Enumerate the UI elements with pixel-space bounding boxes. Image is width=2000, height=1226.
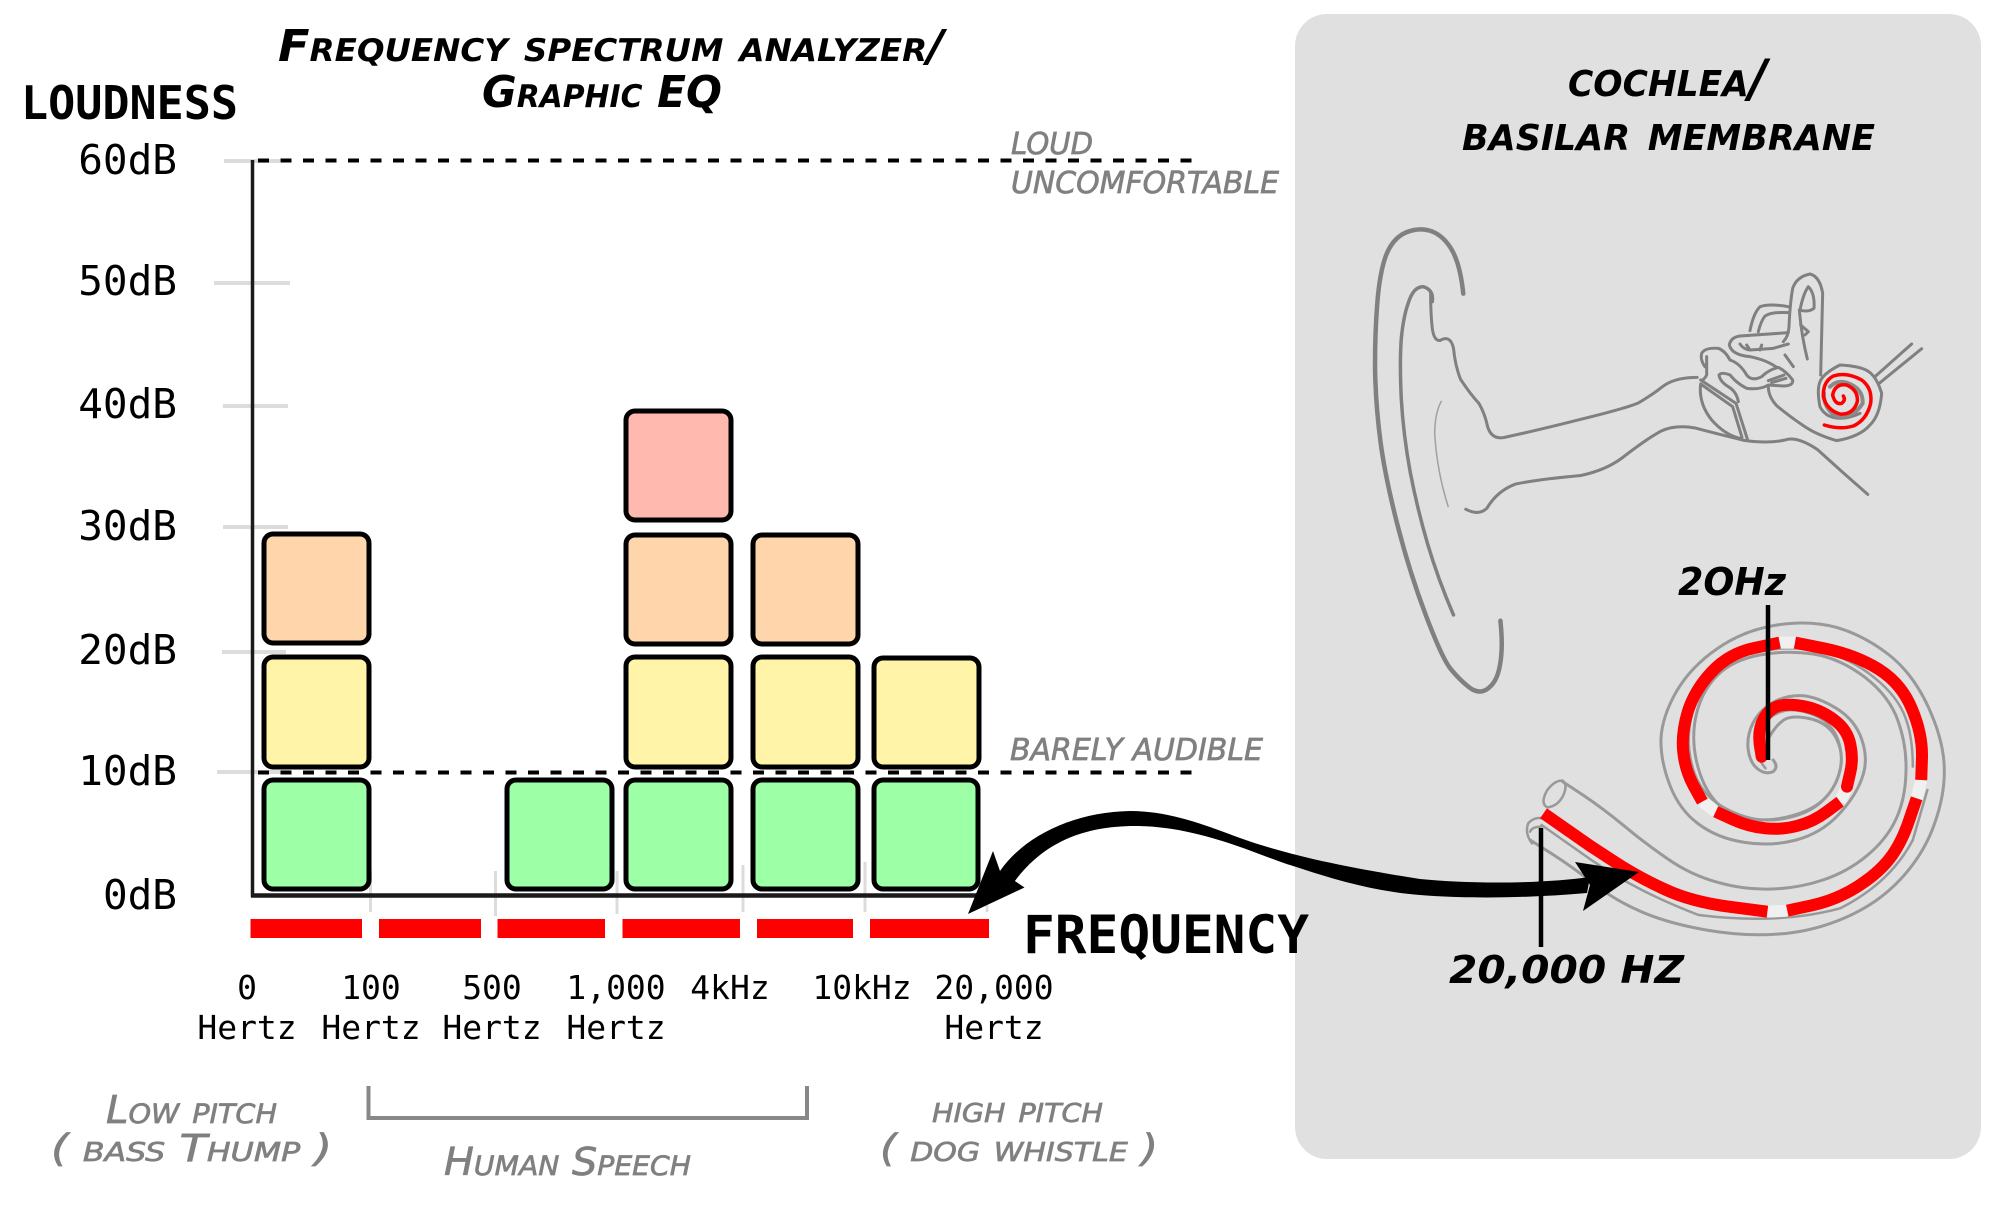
column: 10 kilohertz [874, 658, 979, 889]
x axis labels: 0 [237, 968, 257, 1007]
chart axes [251, 160, 985, 897]
x axis tick marks [370, 862, 987, 916]
x axis labels: Hertz [944, 1008, 1044, 1047]
x axis labels: 500 [462, 968, 522, 1007]
annotation: high pitch: high pitch [932, 1088, 1103, 1131]
heading: cochlea basilar membrane: cochlea/ [1568, 49, 1771, 109]
column: 1,000 hertz [626, 411, 731, 889]
cochlea outline and auditory nerve [1768, 344, 1922, 441]
icon: outer ear and ear canal [1375, 229, 1868, 692]
y axis labels: 50dB [78, 257, 177, 305]
x axis labels: Hertz [566, 1008, 666, 1047]
annotation: loud uncomfortable: UNCOMFORTABLE [1011, 166, 1279, 201]
gaps between basilar membrane segments [1702, 643, 1921, 912]
panel: cochlea background [1295, 14, 1981, 1159]
column: 500 hertz [507, 780, 612, 889]
eardrum [1700, 380, 1747, 439]
annotation: low pitch: ( bass Thump ) [51, 1127, 332, 1170]
heading: cochlea basilar membrane: basilar membrane [1462, 103, 1875, 163]
x axis labels: 100 [341, 968, 401, 1007]
ossicles [1701, 348, 1793, 402]
annotation: loud uncomfortable [1011, 127, 1279, 201]
arrow: frequency bands to basilar membrane [968, 811, 1639, 914]
x axis labels: Hertz [197, 1008, 297, 1047]
heading: cochlea basilar membrane [1462, 49, 1875, 163]
x axis labels: 1,000 [566, 968, 666, 1007]
semicircular canals [1729, 274, 1823, 375]
cochlea tube outlines [1527, 623, 1944, 935]
frequency bands: red bar segments [250, 919, 989, 938]
y axis labels [78, 136, 177, 919]
heading: loudness axis: LOUDNESS [21, 76, 238, 130]
icon: large cochlea diagram [1527, 623, 1944, 935]
y axis labels: 20dB [78, 626, 177, 674]
title: frequency spectrum analyzer [278, 21, 948, 118]
y axis labels: 30dB [78, 502, 177, 550]
x axis labels: Hertz [442, 1008, 542, 1047]
y axis labels: 40dB [78, 380, 177, 428]
y axis labels: 0dB [103, 871, 177, 919]
x axis labels: 20,000 [934, 968, 1054, 1007]
y axis labels: 60dB [78, 136, 177, 184]
bracket: human speech range [368, 1086, 807, 1118]
y axis tick marks [214, 161, 290, 772]
annotation: high pitch [880, 1088, 1158, 1170]
annotation: loud uncomfortable: LOUD [1011, 127, 1093, 162]
pointer line: 20 hertz [1766, 605, 1770, 760]
title: frequency spectrum analyzer: Graphic EQ [482, 67, 722, 118]
heading: frequency axis: FREQUENCY [1023, 905, 1309, 966]
annotation: high pitch: ( dog whistle ) [880, 1127, 1158, 1170]
annotation: human speech: Human Speech [444, 1140, 691, 1184]
label: 20 hertz: 2OHz [1678, 560, 1787, 604]
x axis labels: Hertz [321, 1008, 421, 1047]
x axis labels: 10kHz [812, 968, 912, 1007]
bar chart: equalizer columns [264, 411, 979, 889]
x axis labels [197, 968, 1054, 1047]
column: 0 to 100 hertz [264, 534, 369, 889]
annotation: barely audible: BARELY AUDIBLE [1010, 733, 1263, 768]
basilar membrane red segments [1544, 643, 1922, 912]
loud threshold dashed line [258, 158, 1192, 162]
label: 20,000 hertz: 20,000 HZ [1449, 948, 1686, 992]
barely audible dashed line [258, 770, 1192, 774]
annotation: low pitch: Low pitch [106, 1088, 277, 1132]
title: frequency spectrum analyzer: Frequency spectrum analyzer/ [278, 21, 948, 72]
annotation: low pitch [51, 1088, 332, 1170]
red cochlear spiral [1823, 375, 1871, 428]
pointer line: 20,000 hertz [1539, 828, 1543, 947]
y axis labels: 10dB [78, 747, 177, 795]
column: 4 kilohertz [753, 535, 858, 889]
icon: inner ear with small cochlea [1700, 274, 1922, 441]
x axis labels: 4kHz [690, 968, 770, 1007]
